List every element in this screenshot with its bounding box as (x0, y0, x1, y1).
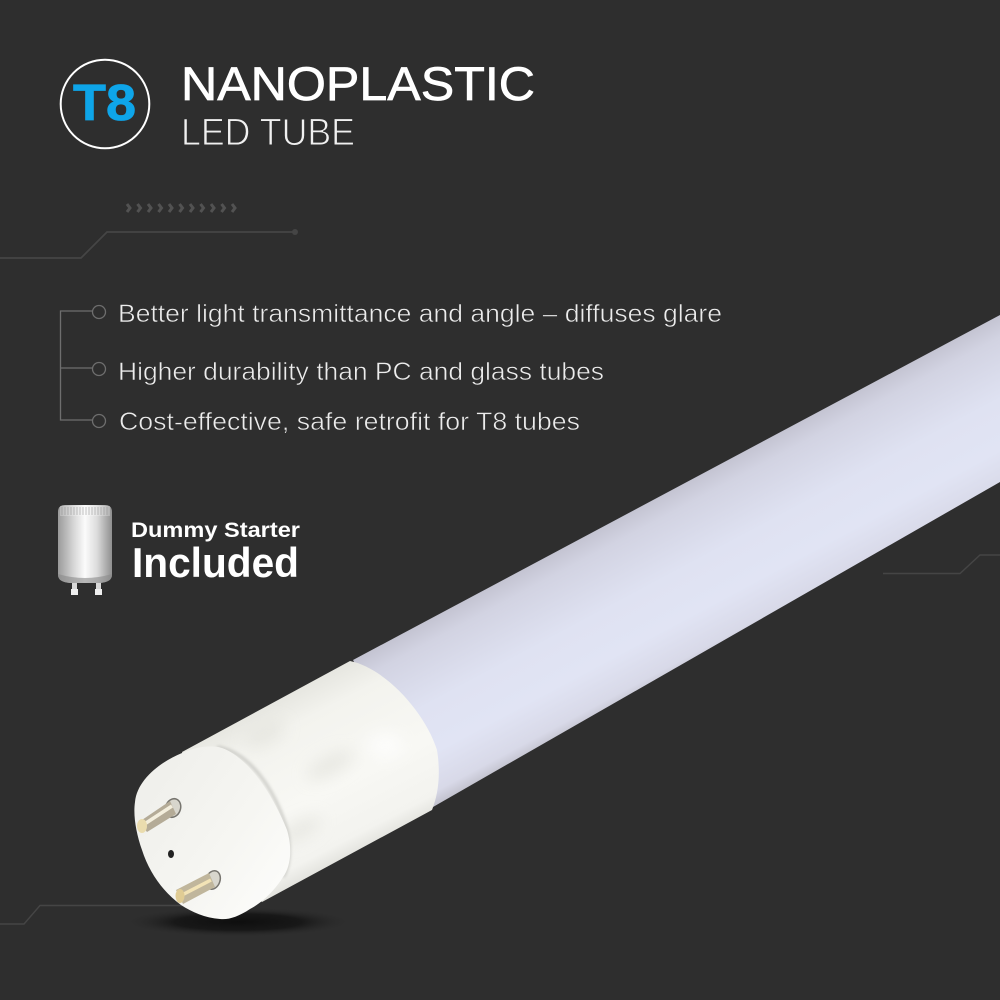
bullet connector tree (60, 306, 106, 428)
cap collar shading (217, 747, 289, 877)
feature list (118, 300, 722, 436)
end cap sleeve (182, 661, 439, 902)
title: LED TUBE (181, 112, 355, 154)
centre hole (168, 850, 174, 858)
lamp shadow (123, 907, 353, 937)
feature list: Higher durability than PC and glass tubes (118, 358, 604, 386)
icon: dummy starter (58, 505, 112, 595)
decorative circuit line bottom left (0, 906, 190, 924)
badge: T8 (61, 60, 149, 148)
starter caption: Included (132, 539, 299, 586)
pin: lower (176, 869, 223, 904)
feature list: Better light transmittance and angle – diffuses glare (118, 300, 722, 328)
decorative circuit line right (883, 555, 1000, 574)
starter caption (131, 519, 300, 586)
starter caption: Dummy Starter (131, 519, 300, 542)
LED tube (123, 315, 1000, 937)
decorative circuit line top left (0, 229, 298, 258)
diffuser tube body (353, 315, 1000, 807)
cap mottling (241, 717, 403, 848)
feature list: Cost-effective, safe retrofit for T8 tubes (119, 408, 580, 436)
pin: upper (137, 797, 183, 833)
end face (134, 746, 290, 919)
title (181, 57, 535, 154)
chevron row (127, 204, 235, 212)
badge: T8: T8 (73, 74, 136, 131)
title: NANOPLASTIC (181, 57, 535, 110)
